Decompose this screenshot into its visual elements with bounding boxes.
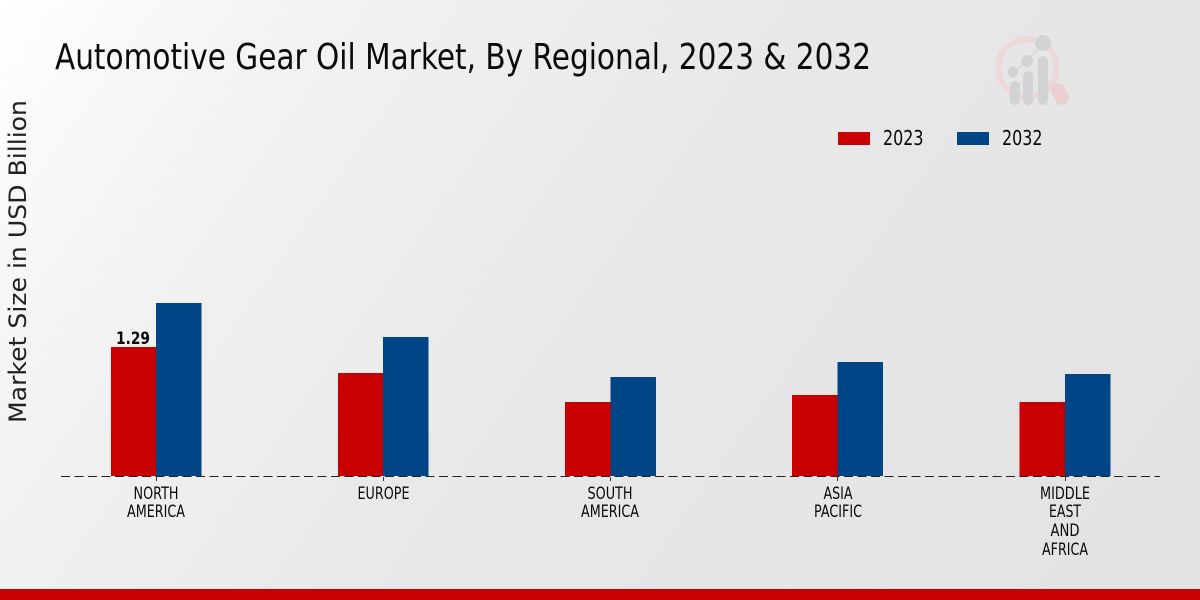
bar chart [61,303,1160,481]
label: Asia Pacific [814,484,862,522]
label: Middle East and Africa [1040,484,1090,560]
label: South America [581,484,639,522]
legend label: 2032: 2032 [1002,126,1042,150]
value label: 1.29: 1.29 [116,329,150,348]
bars: Asia Pacific [792,362,883,476]
bars: North America [111,303,202,476]
label: Middle East and Africa: AND [1050,521,1080,541]
label: Middle East and Africa: AFRICA [1042,540,1088,560]
label: North America: NORTH [134,484,178,504]
label: South America: SOUTH [588,484,632,504]
label: Middle East and Africa: MIDDLE [1040,484,1090,504]
legend label: 2023: 2023 [883,126,924,150]
label: South America: AMERICA [581,502,639,522]
label: Europe: EUROPE [358,484,410,504]
legend swatch: 2023 [838,132,870,145]
legend [838,126,1042,150]
axis ticks [156,477,1066,481]
icon: watermark logo [998,35,1062,105]
y-axis label: Market Size in USD Billion [4,100,32,423]
bars: South America [565,377,656,476]
bottom bar [0,589,1200,600]
label: North America: AMERICA [127,502,185,522]
bars: Middle East and Africa [1020,374,1110,476]
label: North America [127,484,185,522]
x-axis labels [127,484,1090,560]
label: Asia Pacific: PACIFIC [814,502,862,522]
baseline [61,476,1160,478]
label: Middle East and Africa: EAST [1049,502,1081,522]
title: Automotive Gear Oil Market, By Regional, 2023 & 2032 [55,37,871,78]
bars: Europe [338,337,428,476]
legend swatch: 2032 [957,132,989,145]
label: Asia Pacific: ASIA [824,484,853,504]
